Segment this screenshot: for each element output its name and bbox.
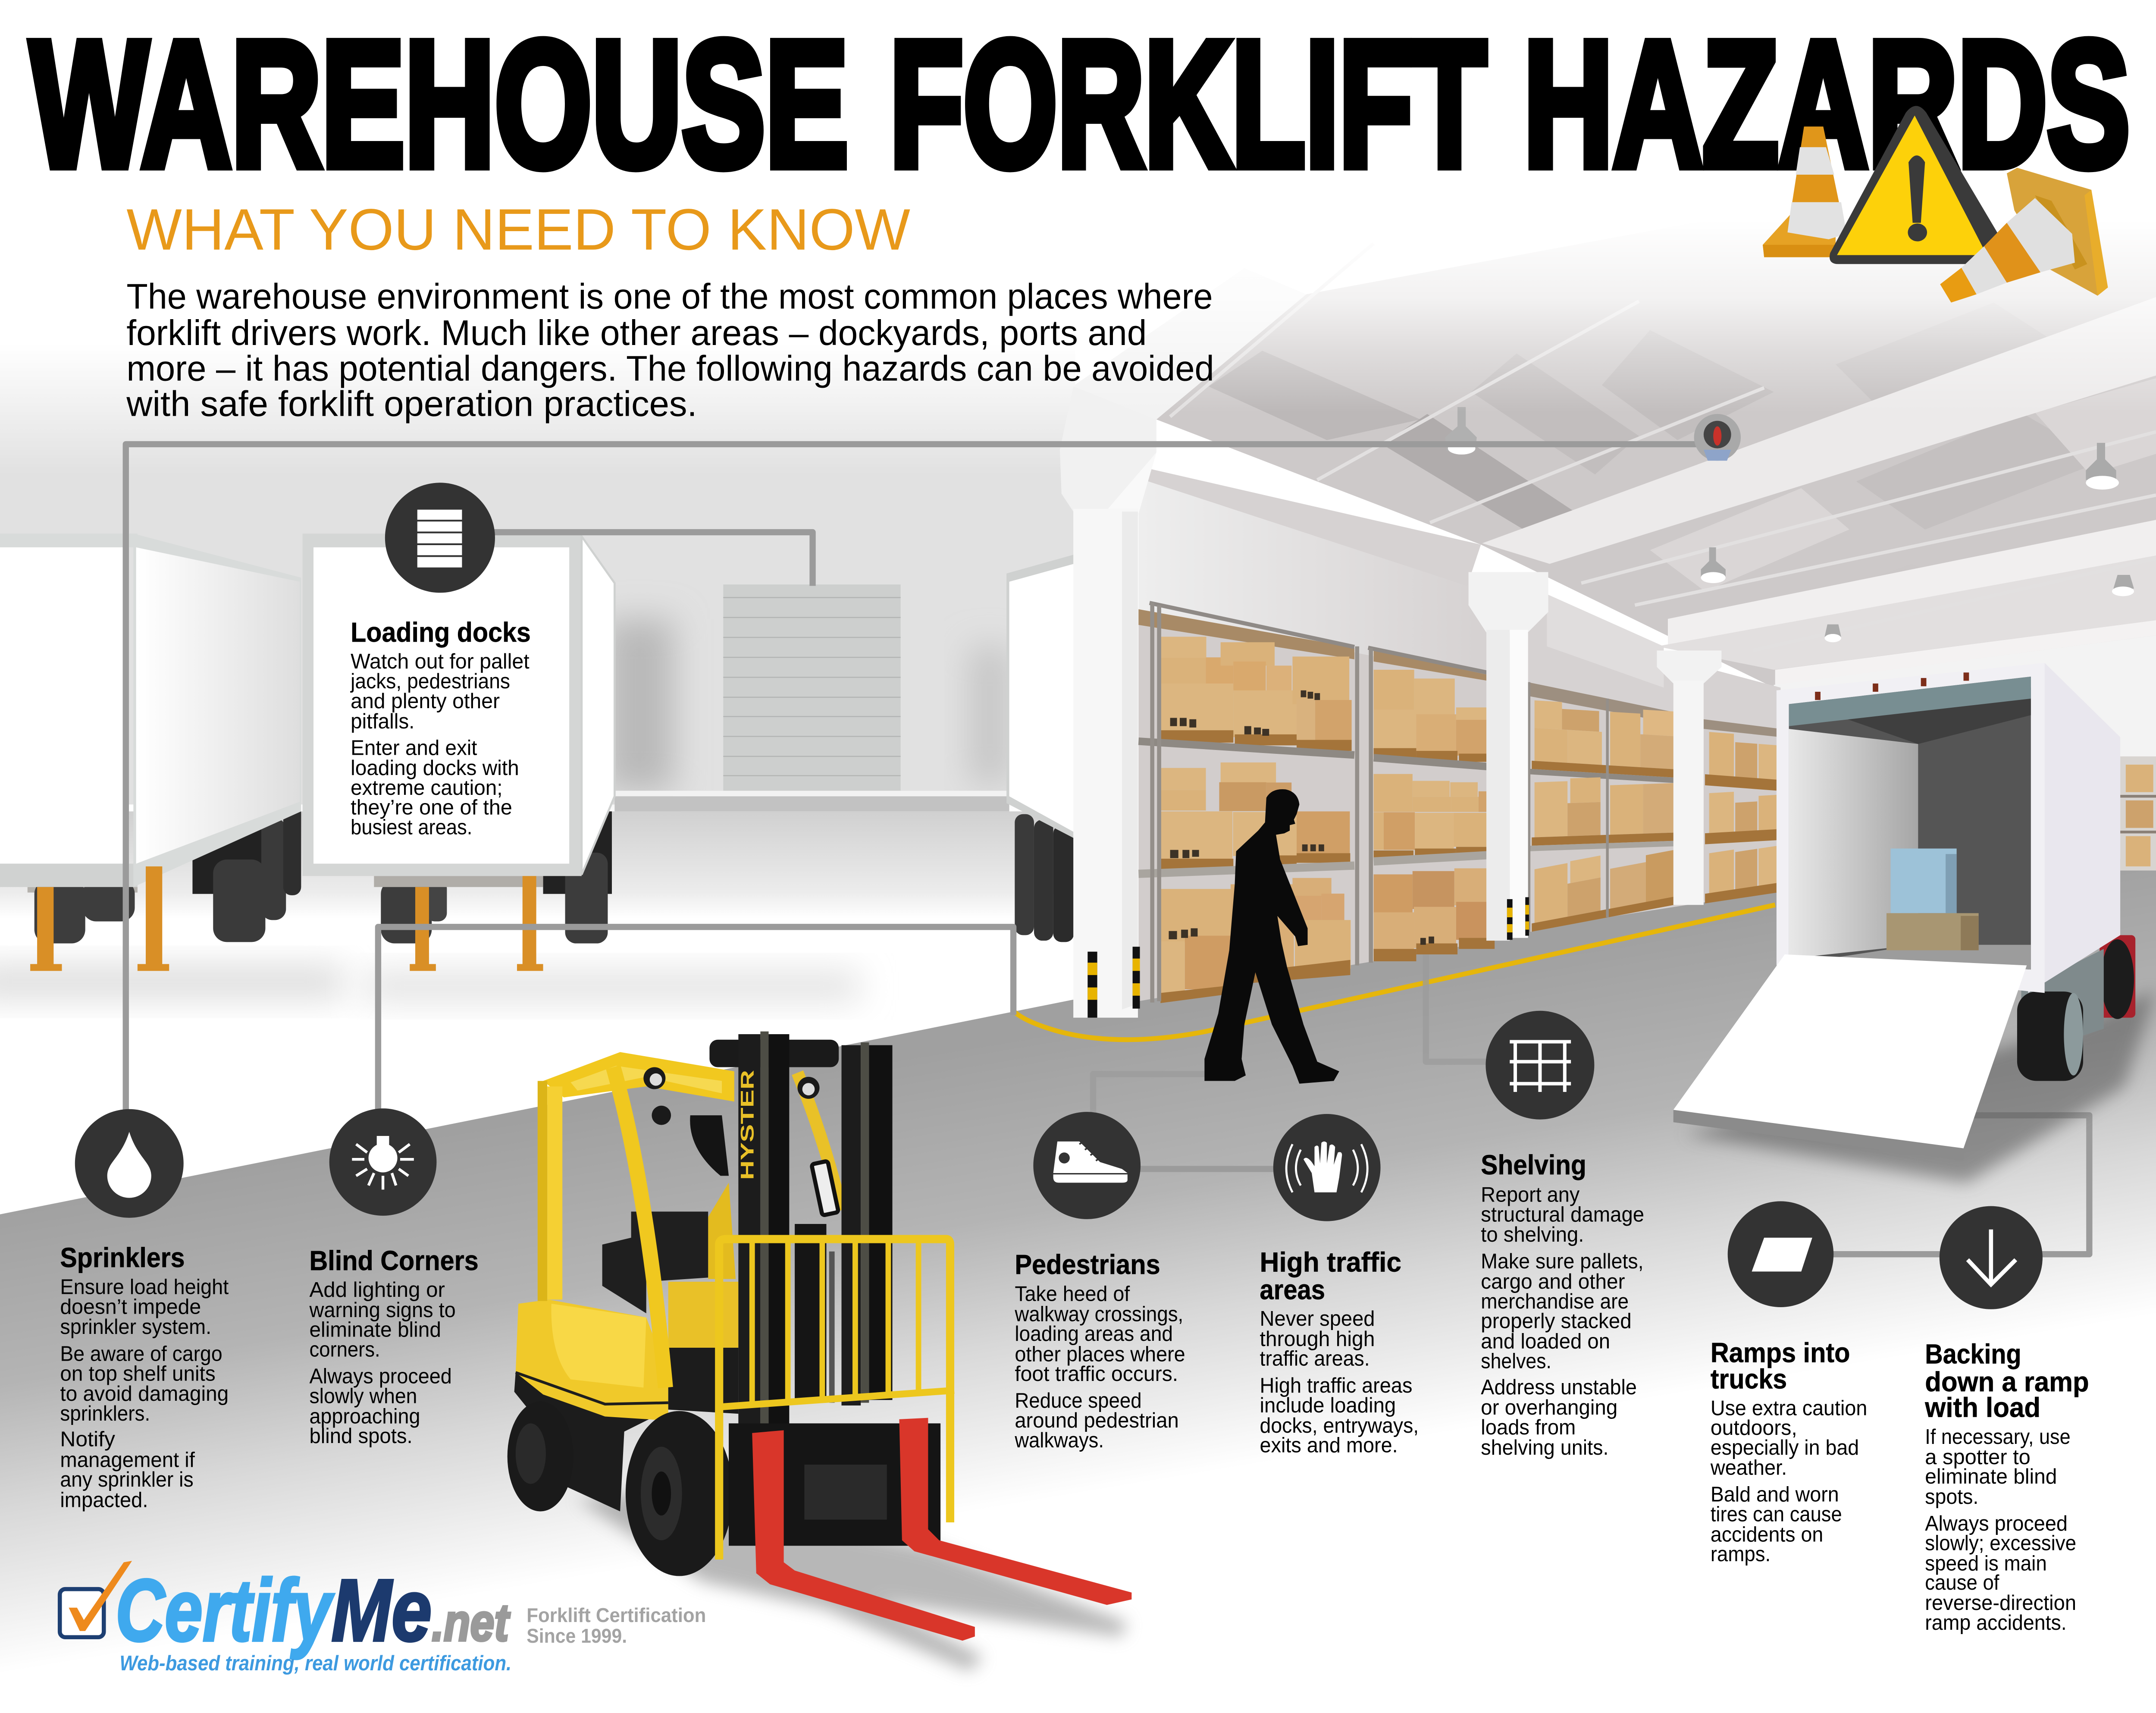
pillar two capital [1469, 572, 1721, 684]
text: sprinklers: sprinkler system. [60, 1315, 211, 1339]
text: backing down a ramp: If necessary, use [1925, 1425, 2071, 1449]
text: sprinklers: Be aware of cargo [60, 1342, 222, 1365]
since 1999 note: Since 1999. [526, 1625, 627, 1647]
text: ramps into trucks: outdoors, [1711, 1416, 1797, 1440]
intro text: The warehouse environment is one of the most common places where [126, 276, 1213, 317]
panel: blind corners [309, 1108, 479, 1448]
heading: ramps into trucks: Ramps into [1711, 1337, 1850, 1368]
level two boxes [1160, 762, 1492, 860]
text: high traffic areas: Never speed [1260, 1307, 1375, 1330]
heading: backing down a ramp: with load [1924, 1392, 2040, 1423]
text: loading docks: Watch out for pallet [351, 649, 530, 673]
rack: section two [1528, 682, 1689, 932]
dock door [723, 584, 901, 791]
truck side wall [2028, 663, 2120, 993]
text: high traffic areas: include loading [1260, 1393, 1396, 1417]
trailer: left [0, 533, 301, 971]
yellow floor line [1013, 905, 1775, 1040]
warehouse floor [0, 855, 2156, 1713]
panel: backing down a ramp [1924, 1206, 2089, 1635]
rack: section one [1138, 602, 1503, 1003]
level one pallets and beam [1138, 730, 1499, 767]
icon: hand [1273, 1114, 1381, 1221]
icon: sneaker [1033, 1112, 1141, 1219]
heading: shelving: Shelving [1481, 1149, 1586, 1180]
panel: shelving [1481, 1011, 1644, 1459]
rack: far right [2120, 756, 2156, 871]
icon: down arrow [1940, 1206, 2043, 1309]
text: ramps into trucks: ramps. [1711, 1542, 1771, 1566]
text: blind corners: eliminate blind [309, 1318, 441, 1342]
text: ramps into trucks: especially in bad [1711, 1436, 1859, 1459]
text: blind corners: approaching [309, 1404, 420, 1428]
text: pedestrians [1014, 1282, 1185, 1452]
text: pedestrians: loading areas and [1015, 1322, 1173, 1346]
wordmark: Me [331, 1561, 432, 1660]
icon: standing cone [1763, 126, 1847, 257]
text: high traffic areas: through high [1260, 1327, 1375, 1351]
heading: blind corners: Blind Corners [309, 1245, 479, 1276]
text: blind corners: warning signs to [309, 1298, 456, 1322]
person silhouette [1204, 789, 1339, 1084]
sprinkler head [1694, 414, 1741, 461]
text: sprinklers: any sprinkler is [60, 1468, 194, 1491]
text: shelving: Address unstable [1481, 1375, 1637, 1399]
text: high traffic areas [1260, 1307, 1419, 1457]
text: ramps into trucks: tires can cause [1711, 1502, 1842, 1526]
text: blind corners: Add lighting or [309, 1278, 445, 1302]
intro text: with safe forklift operation practices. [126, 384, 697, 424]
text: loading docks [350, 649, 530, 839]
text: ramps into trucks [1710, 1396, 1867, 1566]
heading: ramps into trucks: trucks [1711, 1363, 1787, 1394]
icon: dock door [385, 483, 495, 593]
rack top slats [1138, 603, 1500, 683]
text: shelving: loads from [1481, 1415, 1576, 1439]
dock wall shading [605, 619, 1011, 791]
level three boxes [1160, 868, 1495, 994]
trailer: centre [303, 533, 614, 971]
ceiling lamps [1445, 407, 2134, 642]
subtitle: WHAT YOU NEED TO KNOW [126, 197, 910, 262]
heading: loading docks: Loading docks [351, 617, 531, 648]
text: sprinklers: to avoid damaging [60, 1382, 229, 1406]
text: backing down a ramp: a spotter to [1925, 1445, 2031, 1469]
text: pedestrians: Reduce speed [1015, 1389, 1142, 1412]
dock back wall [0, 310, 1075, 804]
text: loading docks: extreme caution; [351, 776, 502, 800]
forklift brand: HYSTER [737, 1070, 758, 1180]
text: pedestrians: around pedestrian [1015, 1409, 1179, 1432]
text: pedestrians: Take heed of [1015, 1282, 1130, 1306]
text: pedestrians: walkways. [1014, 1428, 1104, 1452]
text: loading docks: and plenty other [351, 689, 500, 713]
title [30, 4, 2130, 204]
text: pedestrians: walkway crossings, [1014, 1302, 1183, 1326]
level two pallets and beam [1138, 847, 1499, 874]
text: shelving: properly stacked [1481, 1309, 1632, 1333]
since 1999 note: Forklift Certification [526, 1604, 706, 1626]
truck ramp [1673, 954, 2027, 1161]
panel: loading docks [350, 483, 531, 839]
text: sprinklers: sprinklers. [60, 1402, 150, 1425]
text: backing down a ramp: cause of [1925, 1571, 1999, 1594]
text: shelving: to shelving. [1481, 1223, 1584, 1246]
forklift mast [709, 1032, 940, 1546]
heading: backing down a ramp: Backing [1925, 1339, 2021, 1370]
text: pedestrians: other places where [1015, 1342, 1185, 1366]
icon: water drop [75, 1109, 184, 1218]
text: backing down a ramp: Always proceed [1925, 1512, 2068, 1535]
text: backing down a ramp [1925, 1425, 2076, 1635]
text: sprinklers: Notify [60, 1428, 115, 1451]
wordmark: .net [432, 1593, 511, 1652]
text: shelving: cargo and other [1481, 1270, 1625, 1293]
rack: section three [1704, 719, 1780, 904]
text: blind corners: corners. [309, 1338, 380, 1362]
forklift shadow [577, 1492, 1128, 1671]
text: sprinklers [60, 1275, 229, 1512]
text: shelving: shelves. [1481, 1349, 1551, 1373]
truck undercarriage [2017, 935, 2135, 1081]
heading: backing down a ramp: down a ramp [1925, 1366, 2089, 1397]
text: sprinklers: impacted. [60, 1488, 148, 1512]
text: sprinklers: on top shelf units [60, 1362, 216, 1386]
text: shelving: merchandise are [1481, 1289, 1629, 1313]
text: blind corners: Always proceed [309, 1365, 452, 1388]
text: high traffic areas: exits and more. [1260, 1433, 1398, 1457]
intro text [126, 276, 1214, 424]
dock floor [0, 791, 1075, 1029]
panel: high traffic areas [1260, 1114, 1419, 1457]
intro text: forklift drivers work. Much like other areas – dockyards, ports and [126, 313, 1147, 353]
text: sprinklers: management if [60, 1448, 195, 1471]
text: ramps into trucks: Bald and worn [1711, 1483, 1839, 1506]
title: FORKLIFT [890, 4, 1486, 204]
text: ramps into trucks: weather. [1710, 1456, 1787, 1480]
text: backing down a ramp: speed is main [1925, 1552, 2047, 1575]
text: blind corners [309, 1278, 456, 1448]
heading: pedestrians: Pedestrians [1015, 1249, 1160, 1280]
text: blind corners: blind spots. [309, 1424, 413, 1448]
icon: ramp [1728, 1201, 1833, 1307]
text: backing down a ramp: slowly; excessive [1925, 1531, 2076, 1555]
text: backing down a ramp: ramp accidents. [1925, 1611, 2067, 1635]
heading: backing down a ramp [1924, 1339, 2089, 1423]
text: shelving: Report any [1481, 1183, 1580, 1206]
heading: ramps into trucks [1711, 1337, 1850, 1394]
text: shelving: Make sure pallets, [1481, 1249, 1644, 1273]
heading: sprinklers: Sprinklers [60, 1242, 185, 1273]
wordmark: Certify [116, 1561, 334, 1660]
panel: pedestrians [1014, 1112, 1185, 1452]
text: pedestrians: foot traffic occurs. [1015, 1362, 1178, 1386]
text: shelving: shelving units. [1481, 1436, 1609, 1459]
text: high traffic areas: docks, entryways, [1260, 1414, 1419, 1437]
panel: ramps into trucks [1710, 1201, 1867, 1566]
forklift forks [752, 1418, 1131, 1641]
pillars [1073, 509, 1704, 1018]
icon: warning sign and cones [1763, 106, 2108, 303]
text: high traffic areas: High traffic areas [1260, 1374, 1413, 1397]
level three pallets [1160, 938, 1495, 1003]
tagline: Web-based training, real world certification. [119, 1651, 511, 1675]
logo: CertifyMe [60, 1561, 706, 1675]
text: sprinklers: doesn’t impede [60, 1295, 201, 1319]
forklift rear [508, 1299, 668, 1511]
box handling marks [1169, 690, 1434, 945]
forklift seat and engine [602, 1115, 738, 1414]
text: backing down a ramp: spots. [1925, 1485, 1978, 1509]
text: loading docks: busiest areas. [351, 816, 472, 839]
truck rear frame [1777, 663, 2045, 993]
forklift [508, 1032, 1131, 1671]
text: shelving: or overhanging [1481, 1396, 1617, 1419]
truck shadow [1684, 990, 2156, 1183]
text: blind corners: slowly when [309, 1384, 417, 1408]
icon: checkbox [60, 1561, 132, 1637]
title: WAREHOUSE [30, 4, 848, 204]
forklift front wheel [626, 1411, 733, 1576]
panel: sprinklers [60, 1109, 229, 1512]
text: loading docks: Enter and exit [351, 736, 477, 760]
delivery truck [1673, 663, 2135, 1161]
text: backing down a ramp: eliminate blind [1925, 1465, 2057, 1488]
text: shelving: structural damage [1481, 1202, 1644, 1226]
text: loading docks: pitfalls. [351, 709, 414, 733]
text: high traffic areas: traffic areas. [1260, 1346, 1370, 1370]
intro text: more – it has potential dangers. The following hazards can be avoided [126, 348, 1214, 388]
icon: warning triangle [1830, 106, 2011, 264]
heading: high traffic areas: areas [1260, 1274, 1325, 1305]
forklift guard frame [719, 1239, 954, 1559]
level one boxes [1160, 637, 1493, 756]
icon: shelving grid [1485, 1011, 1594, 1120]
ceiling white fade [1067, 82, 2156, 413]
heading: high traffic areas: High traffic [1260, 1246, 1401, 1277]
text: shelving [1481, 1183, 1644, 1459]
connector lines [126, 444, 2089, 1254]
text: ramps into trucks: Use extra caution [1711, 1396, 1867, 1420]
icon: light bulb [329, 1108, 436, 1216]
text: loading docks: jacks, pedestrians [350, 669, 510, 693]
text: ramps into trucks: accidents on [1711, 1522, 1823, 1546]
trailer: right [1006, 554, 1075, 942]
warehouse ceiling [1072, 138, 2156, 770]
heading: high traffic areas [1260, 1246, 1401, 1305]
icon: fallen cone [1940, 168, 2108, 303]
warehouse back walls [1138, 469, 1780, 1018]
text: shelving: and loaded on [1481, 1330, 1610, 1353]
since 1999 note [526, 1604, 706, 1647]
text: loading docks: loading docks with [351, 756, 519, 780]
text: backing down a ramp: reverse-direction [1925, 1591, 2076, 1615]
truck interior [1789, 677, 2031, 969]
pillar capital [1060, 386, 1156, 516]
forklift roof guard [543, 1052, 734, 1101]
text: sprinklers: Ensure load height [60, 1275, 229, 1299]
text: loading docks: they’re one of the [351, 796, 512, 819]
